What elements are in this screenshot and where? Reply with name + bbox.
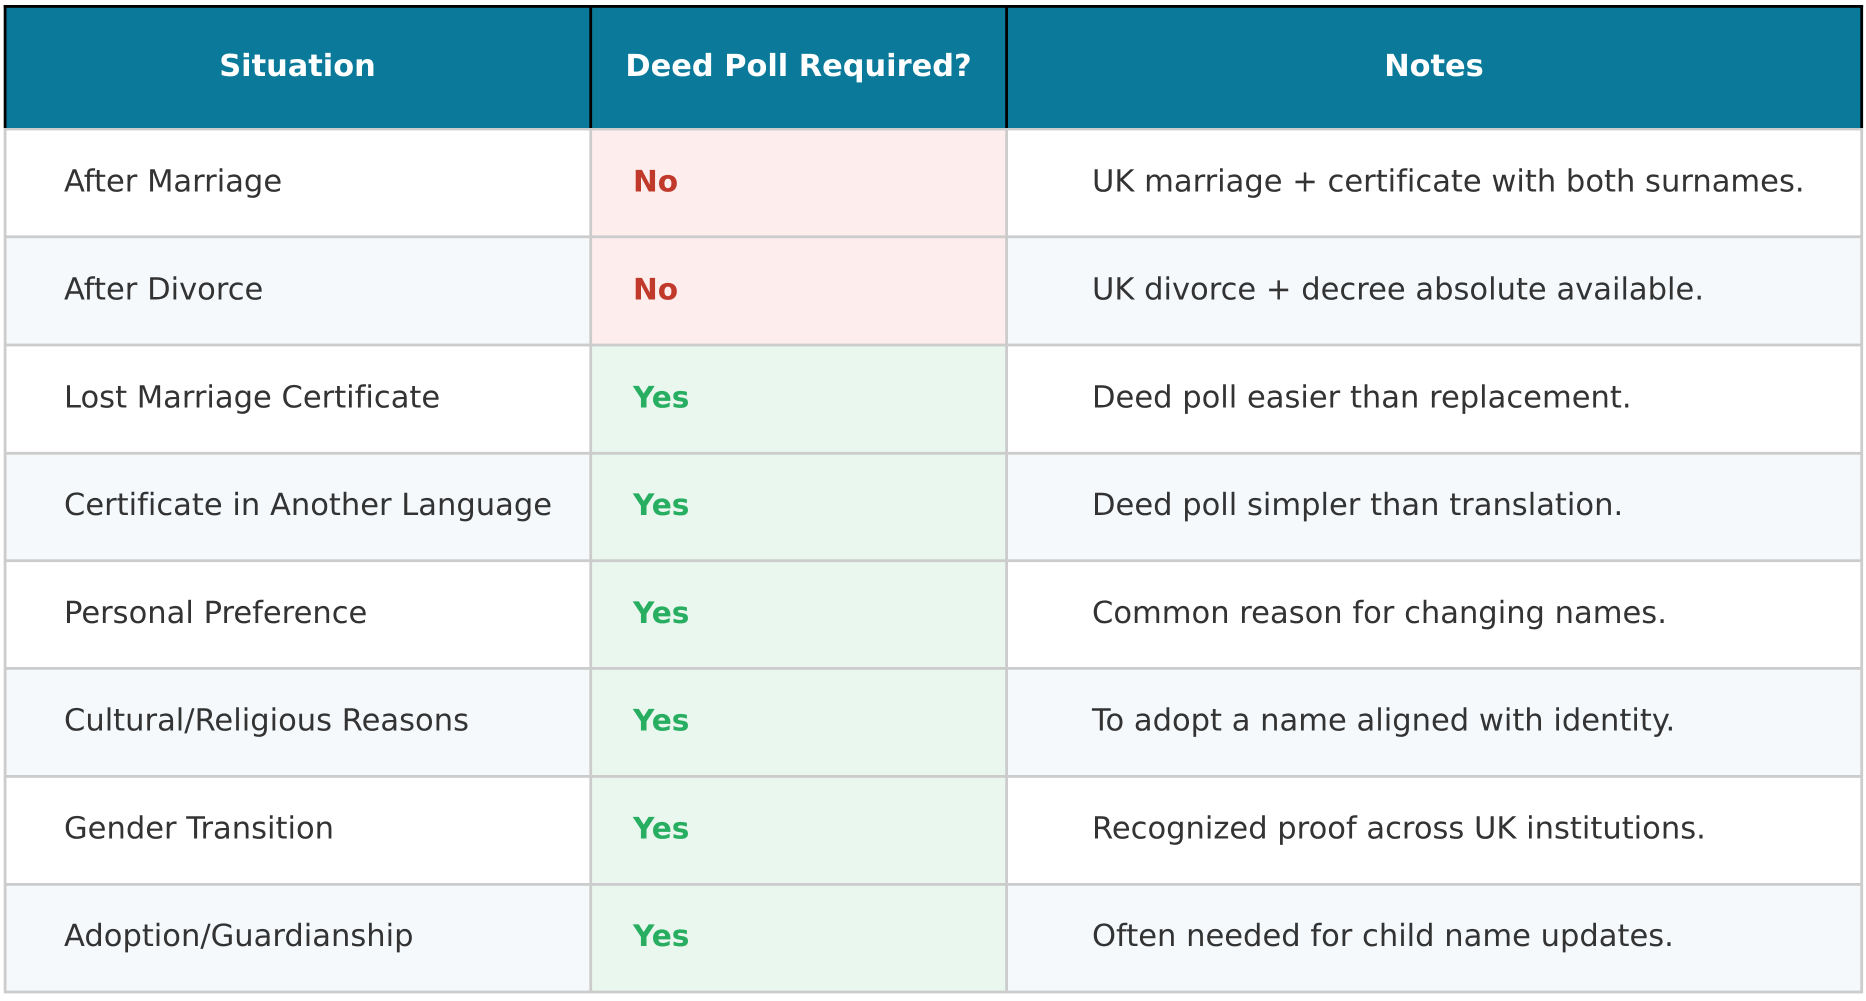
row: After Marriage: After Marriage — [64, 164, 282, 200]
row: Personal Preference: Yes — [632, 596, 689, 630]
row: Gender Transition: Gender Transition — [64, 812, 334, 846]
row: After Marriage: No — [633, 164, 678, 198]
row: Gender Transition: Yes — [632, 812, 689, 846]
header band: Notes — [1384, 49, 1484, 84]
row: Adoption/Guardianship — [64, 919, 1674, 954]
row: After Marriage: UK marriage + certificate with both surnames. — [1092, 164, 1805, 200]
row: Lost Marriage Certificate: Yes — [632, 380, 689, 414]
row: Certificate in Another Language: Deed poll simpler than translation. — [1092, 488, 1623, 523]
row: Lost Marriage Certificate — [64, 380, 1632, 416]
row: Personal Preference — [64, 596, 1667, 631]
answer column tints — [590, 128, 1007, 992]
row: Cultural/Religious Reasons — [64, 704, 1675, 738]
row: Personal Preference: Personal Preference — [64, 596, 367, 631]
header band — [4, 5, 1863, 128]
row: Cultural/Religious Reasons: To adopt a name aligned with identity. — [1091, 704, 1675, 738]
row: After Marriage — [64, 164, 1805, 200]
header band: Situation — [219, 49, 376, 84]
row: Adoption/Guardianship: Adoption/Guardianship — [64, 919, 414, 954]
row: Gender Transition — [64, 812, 1706, 846]
row: Gender Transition: Recognized proof across UK institutions. — [1092, 812, 1706, 846]
row: Lost Marriage Certificate: Lost Marriage Certificate — [64, 380, 440, 416]
row: Adoption/Guardianship: Yes — [632, 919, 689, 953]
row: Certificate in Another Language: Yes — [632, 488, 689, 522]
row: Personal Preference: Common reason for changing names. — [1092, 596, 1667, 631]
row: After Divorce — [64, 272, 1704, 308]
header band: Deed Poll Required? — [625, 49, 972, 84]
row: Cultural/Religious Reasons: Cultural/Religious Reasons — [64, 704, 469, 738]
row: After Divorce: UK divorce + decree absolute available. — [1092, 272, 1704, 308]
row: Certificate in Another Language: Certificate in Another Language — [64, 488, 552, 523]
row: Adoption/Guardianship: Often needed for child name updates. — [1092, 919, 1674, 954]
row: After Divorce: No — [633, 272, 678, 306]
row: Certificate in Another Language — [64, 488, 1623, 523]
row: After Divorce: After Divorce — [64, 272, 263, 308]
row: Lost Marriage Certificate: Deed poll easier than replacement. — [1092, 380, 1632, 416]
row: Cultural/Religious Reasons: Yes — [632, 704, 689, 738]
